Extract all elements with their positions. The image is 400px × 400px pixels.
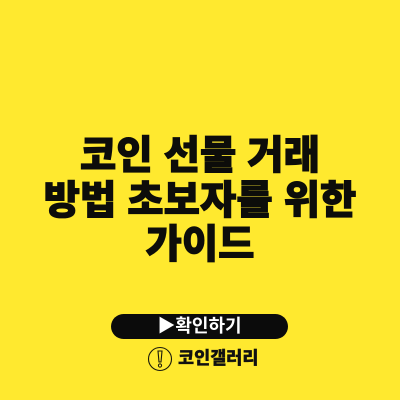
title bbox=[44, 134, 356, 267]
icon: exclamation circle bbox=[148, 347, 172, 371]
title: 방법 초보자를 위한 bbox=[44, 178, 356, 222]
brand name: 코인갤러리 bbox=[178, 348, 258, 368]
button: confirm: ▶확인하기 bbox=[157, 316, 242, 336]
title: 코인 선물 거래 bbox=[80, 134, 320, 178]
title: 가이드 bbox=[145, 223, 255, 267]
button: confirm bbox=[111, 314, 288, 339]
